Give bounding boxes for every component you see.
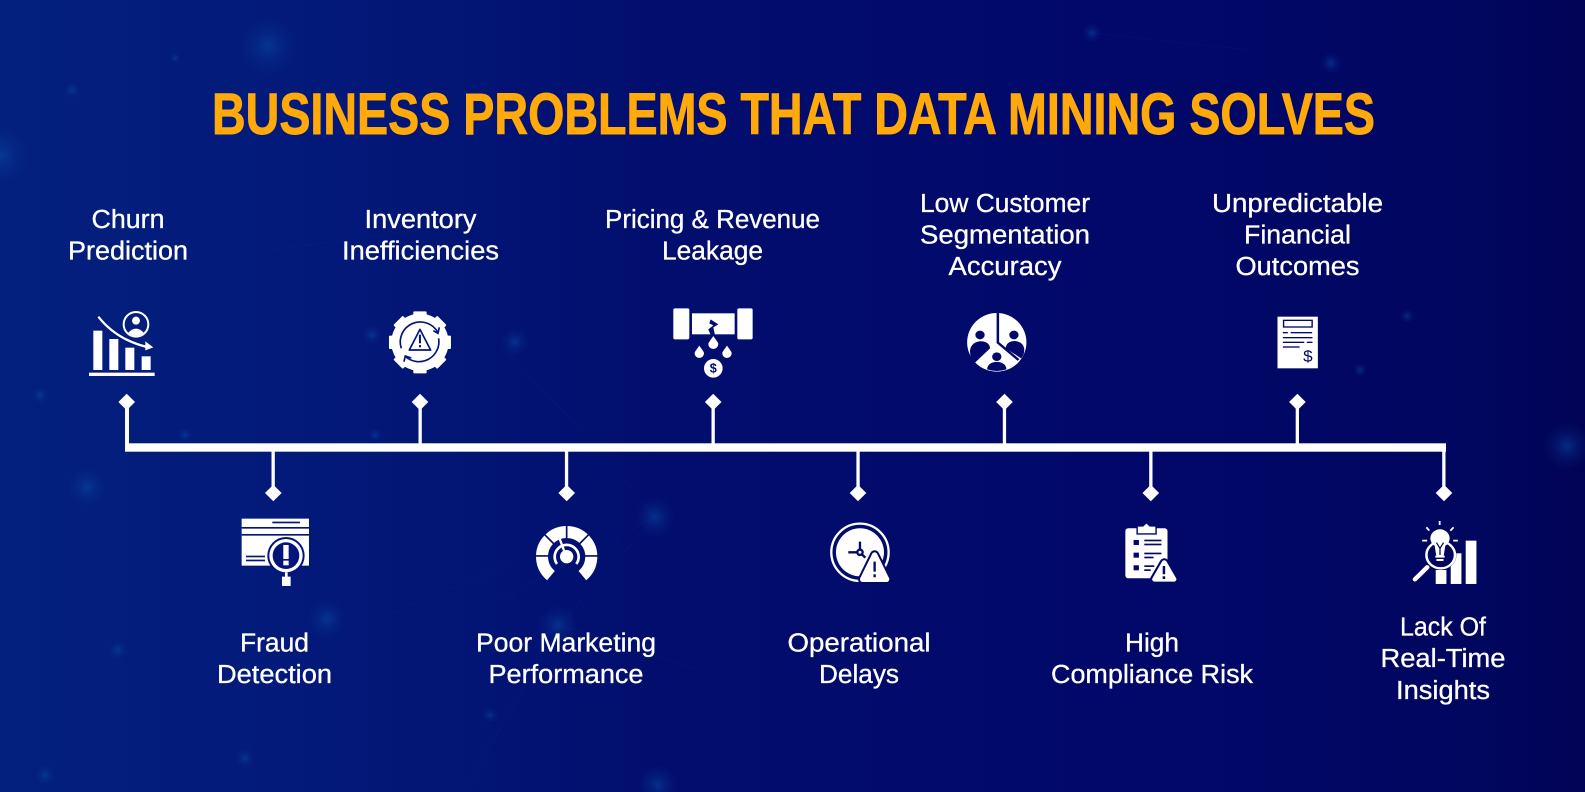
icon: leaking pipe with dollar: [673, 308, 753, 378]
label: Fraud Detection: Detection: [217, 661, 332, 689]
item: Poor Marketing Performance: [476, 451, 656, 689]
connector: Fraud Detection: [265, 451, 282, 501]
label: Lack Of Real-Time Insights: [1380, 614, 1506, 705]
connector: Unpredictable Financial Outcomes: [1289, 394, 1306, 445]
label: Low Customer Segmentation Accuracy: Low Customer: [920, 190, 1091, 218]
connector: Churn Prediction: [118, 394, 135, 447]
label: Unpredictable Financial Outcomes: Financial: [1244, 222, 1351, 250]
icon: checklist with warning: [1125, 523, 1174, 579]
connector: Low Customer Segmentation Accuracy: [996, 394, 1013, 445]
label: Fraud Detection: [217, 630, 332, 689]
label: Pricing & Revenue Leakage: Pricing & Revenue: [605, 206, 820, 234]
connector: Poor Marketing Performance: [558, 451, 575, 501]
item: Churn Prediction: [68, 206, 188, 447]
connector: Lack Of Real-Time Insights: [1436, 449, 1452, 501]
label: Operational Delays: [788, 630, 930, 689]
label: Poor Marketing Performance: [476, 630, 656, 689]
icon: financial document: [1277, 317, 1318, 368]
item: Pricing & Revenue Leakage: [605, 206, 820, 445]
icon: clock with warning: [831, 524, 889, 581]
label: Inventory Inefficiencies: Inventory: [364, 206, 477, 234]
label: Pricing & Revenue Leakage: Leakage: [662, 238, 763, 266]
label: Unpredictable Financial Outcomes: Outcomes: [1236, 253, 1360, 281]
label: Inventory Inefficiencies: [342, 206, 499, 266]
label: Pricing & Revenue Leakage: [605, 206, 820, 266]
icon: leaking pipe with dollar: $: [710, 362, 717, 376]
item: Inventory Inefficiencies: [342, 206, 499, 445]
label: Unpredictable Financial Outcomes: Unpredictable: [1212, 190, 1383, 218]
label: Lack Of Real-Time Insights: Lack Of: [1400, 614, 1487, 642]
label: High Compliance Risk: High: [1125, 630, 1179, 658]
icon: gear with warning: [389, 311, 451, 373]
icon: customer segment pie: [967, 313, 1026, 372]
label: Inventory Inefficiencies: Inefficiencies: [342, 238, 499, 266]
timeline axis: [125, 443, 1446, 452]
connector: Operational Delays: [850, 451, 866, 501]
label: High Compliance Risk: [1051, 630, 1253, 689]
label: Churn Prediction: Churn: [92, 206, 164, 234]
label: Churn Prediction: [68, 206, 188, 266]
connector: High Compliance Risk: [1142, 451, 1159, 501]
label: Fraud Detection: Fraud: [240, 630, 309, 658]
item: Unpredictable Financial Outcomes: [1212, 190, 1383, 445]
item: Fraud Detection: [217, 451, 332, 689]
label: Lack Of Real-Time Insights: Real-Time: [1380, 645, 1506, 673]
item: Low Customer Segmentation Accuracy: [920, 190, 1091, 445]
label: Operational Delays: Operational: [788, 630, 930, 658]
icon: falling bar chart with customer: [89, 312, 155, 376]
label: Poor Marketing Performance: Performance: [488, 661, 644, 689]
item: Lack Of Real-Time Insights: [1380, 449, 1506, 705]
label: High Compliance Risk: Compliance Risk: [1051, 661, 1253, 689]
label: Unpredictable Financial Outcomes: [1212, 190, 1383, 281]
connector: Inventory Inefficiencies: [412, 394, 428, 445]
label: Lack Of Real-Time Insights: Insights: [1396, 677, 1490, 705]
label: Low Customer Segmentation Accuracy: Accuracy: [948, 253, 1062, 281]
label: Low Customer Segmentation Accuracy: Segmentation: [920, 222, 1090, 250]
label: Churn Prediction: Prediction: [68, 238, 188, 266]
item: Operational Delays: [788, 451, 930, 689]
connector: Pricing & Revenue Leakage: [705, 394, 722, 445]
icon: financial document: $: [1303, 347, 1313, 365]
label: Poor Marketing Performance: Poor Marketing: [476, 630, 656, 658]
icon: web page with magnifier alert: [242, 519, 309, 586]
label: Low Customer Segmentation Accuracy: [920, 190, 1091, 281]
icon: insight bulb with magnifier and bars: [1415, 521, 1476, 584]
label: Operational Delays: Delays: [819, 661, 899, 689]
item: High Compliance Risk: [1051, 451, 1253, 689]
icon: performance gauge: [535, 524, 598, 576]
